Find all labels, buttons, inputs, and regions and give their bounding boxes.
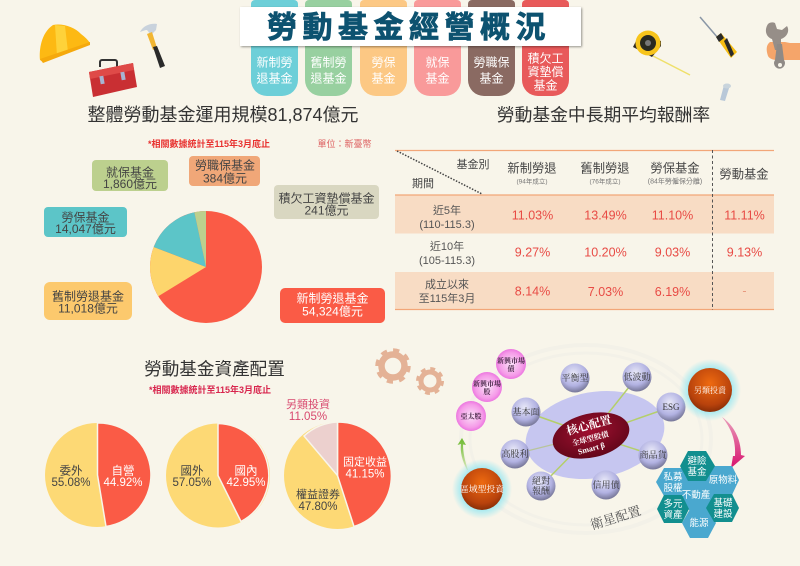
node: 商品貨 <box>638 440 668 470</box>
row: 近10年: 9.13% <box>727 246 762 260</box>
icon: helmet <box>40 24 90 63</box>
row: 成立以來: 6.19% <box>655 285 690 299</box>
satellite label: 衛星配置 <box>589 503 643 532</box>
row: 成立以來: - <box>742 284 747 298</box>
label: 舊制勞退基金: 11,018億元 <box>58 302 118 316</box>
hex: 多元資產 <box>657 495 689 523</box>
diagram: core satellite allocation <box>452 345 745 538</box>
table header <box>412 157 769 190</box>
core ellipse: Smart β <box>577 441 606 456</box>
tabs: fund categories <box>251 0 569 96</box>
pie: 國內 國外: 國外 <box>180 464 204 478</box>
pie: 固定收益 權益證券 另類投資: 41.15% <box>345 468 385 480</box>
icon: gears <box>377 350 442 394</box>
note: asset allocation date: *相關數據統計至115年3月底止 <box>149 384 271 395</box>
tab: 積欠工資墊償基金: 積欠工 <box>527 50 564 66</box>
node: 區域型投資: 區域型投資 <box>460 483 505 494</box>
node: 新興市場股: 新興市場 <box>473 379 501 388</box>
tab: 舊制勞退基金 <box>305 0 352 96</box>
pie: 國內 國外: 國內 <box>234 464 258 478</box>
row: 成立以來 <box>419 277 747 305</box>
tab: 積欠工資墊償基金: 資墊償 <box>527 65 564 79</box>
pie: 國內 國外: 57.05% <box>172 477 212 489</box>
tab: 積欠工資墊償基金: 基金 <box>533 78 558 92</box>
row: 成立以來: 至115年3月 <box>419 291 475 305</box>
note: data date: *相關數據統計至115年3月底止 <box>148 138 270 149</box>
node: 高股利: 高股利 <box>501 448 529 459</box>
node: 基本面: 基本面 <box>512 406 540 417</box>
node: 新興市場債: 新興市場 <box>497 356 525 365</box>
label: 新制勞退基金: 新制勞退基金 <box>296 290 369 306</box>
row: 成立以來: 7.03% <box>588 285 623 299</box>
tab: 舊制勞退基金: 退基金 <box>310 70 347 86</box>
node: 新興市場股 <box>472 372 502 402</box>
pie: 國內 國外 <box>166 424 270 528</box>
row: 近10年: 9.03% <box>655 246 690 260</box>
pie: 固定收益 權益證券 另類投資 <box>284 422 391 529</box>
hex: 基礎建設: 基礎 <box>713 497 733 509</box>
node: ESG <box>656 392 686 422</box>
title banner: 勞動基金經營概況 <box>267 12 551 44</box>
pie: 自營 委外 <box>45 423 151 527</box>
tab: 勞職保基金 <box>468 0 515 96</box>
label: 就保基金: 1,860億元 <box>103 177 157 191</box>
tab: 舊制勞退基金: 舊制勞 <box>310 56 347 70</box>
hex: 多元資產: 資產 <box>663 509 683 521</box>
pie: 自營 委外: 55.08% <box>51 477 91 489</box>
tab: 勞保基金: 勞保 <box>371 56 396 70</box>
pie chart: fund size <box>150 211 262 323</box>
label: 勞職保基金: 勞職保基金 <box>195 158 255 172</box>
node: 亞太股 <box>456 401 486 431</box>
hex: 私募股權: 股權 <box>663 482 683 494</box>
node: 低波動: 低波動 <box>623 371 651 382</box>
label: 積欠工資墊償基金: 241億元 <box>304 204 349 218</box>
label: 另類投資 <box>286 397 330 423</box>
pie: 固定收益 權益證券 另類投資: 固定收益 <box>343 454 387 468</box>
row: 近10年: (105-115.3) <box>419 255 475 267</box>
tab: 新制勞退基金: 新制勞 <box>256 54 293 70</box>
pie: 國內 國外: 42.95% <box>226 477 266 489</box>
pie: 自營 委外: 44.92% <box>103 477 143 489</box>
row: 近5年: 近5年 <box>433 203 461 217</box>
row: 成立以來: 成立以來 <box>425 277 469 291</box>
icon: screwdriver <box>700 17 737 58</box>
table header: (76年成立) <box>589 176 621 186</box>
tab: 新制勞退基金: 退基金 <box>256 70 293 86</box>
hex: 避險基金: 基金 <box>687 466 707 478</box>
row: 近10年: 9.27% <box>515 246 550 260</box>
pie: 自營 委外: 委外 <box>60 464 83 478</box>
node: 另類投資: 另類投資 <box>694 385 727 395</box>
node: 基本面 <box>512 398 540 426</box>
node: 絕對報酬 <box>526 472 556 500</box>
heading: total fund size: 整體勞動基金運用規模81,874億元 <box>87 105 359 125</box>
core ellipse: 全球型股債 <box>571 428 611 448</box>
row: 近5年: 11.03% <box>512 208 553 222</box>
tab: 就保基金: 基金 <box>425 70 450 86</box>
icon: hand with wrench <box>766 22 800 69</box>
hex: 多元資產: 多元 <box>663 498 683 510</box>
node: 絕對報酬: 報酬 <box>532 485 550 496</box>
label: 另類投資: 11.05% <box>289 411 327 423</box>
node: 絕對報酬: 絕對 <box>532 475 550 486</box>
label: 積欠工資墊償基金 <box>274 185 379 219</box>
label: 勞保基金: 14,047億元 <box>55 222 116 236</box>
label: 勞保基金: 勞保基金 <box>61 210 110 224</box>
row: 近5年: 13.49% <box>584 208 627 222</box>
node: 信用債 <box>592 470 620 500</box>
label: 舊制勞退基金: 舊制勞退基金 <box>52 288 124 304</box>
arrow: magenta <box>722 417 745 468</box>
note: unit: 單位：新臺幣 <box>317 138 372 149</box>
table header: 勞保基金 <box>650 160 700 176</box>
label: 新制勞退基金: 54,324億元 <box>302 304 363 318</box>
hex: 私募股權 <box>656 468 689 496</box>
label: 就保基金 <box>92 160 168 191</box>
node: 低波動 <box>622 362 652 392</box>
label: 勞保基金 <box>44 207 127 237</box>
icon: hammer <box>140 24 165 68</box>
node: 亞太股: 亞太股 <box>460 412 482 420</box>
tab: 就保基金 <box>414 0 461 96</box>
node: 區域型投資 <box>452 459 512 519</box>
node: 平衡型: 平衡型 <box>561 372 589 383</box>
hex: 不動產: 不動產 <box>682 489 711 501</box>
node: 高股利 <box>500 440 530 468</box>
node: 新興市場股: 股 <box>484 387 490 396</box>
node: 商品貨: 商品貨 <box>639 449 667 460</box>
arrow: green <box>458 438 468 470</box>
table header: 舊制勞退 <box>580 162 630 176</box>
label: 就保基金: 就保基金 <box>106 164 154 180</box>
core ellipse: 核心配置 <box>565 412 613 438</box>
row: 近5年: 11.10% <box>652 208 693 222</box>
label: 勞職保基金: 384億元 <box>203 172 247 186</box>
hexagon cluster: alternatives <box>656 451 739 538</box>
node: 新興市場債: 債 <box>508 364 516 373</box>
node: 另類投資 <box>679 359 741 421</box>
node: 信用債: 信用債 <box>592 479 620 490</box>
table header: 期間 <box>412 177 434 190</box>
table header: 新制勞退 <box>507 160 557 176</box>
tab: 勞保基金: 基金 <box>371 70 396 86</box>
label: 舊制勞退基金 <box>44 282 132 320</box>
orbit rings <box>461 345 711 533</box>
table header: 勞動基金 <box>719 166 769 182</box>
hex: 避險基金: 避險 <box>687 455 707 467</box>
row: 近5年: (110-115.3) <box>419 219 475 231</box>
tab: 新制勞退基金 <box>251 0 298 96</box>
node: 新興市場債 <box>496 349 526 379</box>
label: 新制勞退基金 <box>280 288 385 323</box>
row: 近5年: 11.11% <box>724 208 765 222</box>
row: 近10年: 10.20% <box>584 246 627 260</box>
row: 近10年: 近10年 <box>430 239 464 253</box>
pie: 固定收益 權益證券 另類投資: 權益證券 <box>296 487 340 501</box>
label: 勞職保基金 <box>189 156 260 186</box>
heading: asset allocation: 勞動基金資產配置 <box>144 359 285 379</box>
hex: 私募股權: 私募 <box>663 471 683 483</box>
core ellipse <box>515 377 671 490</box>
hex: 基礎建設 <box>706 494 739 522</box>
table header: (84年勞僱保分離) <box>648 176 702 186</box>
tab: 勞保基金 <box>360 0 407 96</box>
hex: 原物料: 原物料 <box>709 474 738 486</box>
pie: 自營 委外: 自營 <box>112 464 134 478</box>
table header: (94年成立) <box>516 176 548 186</box>
hex: 基礎建設: 建設 <box>713 508 733 520</box>
icon: tape measure <box>633 30 690 75</box>
heading: long term returns: 勞動基金中長期平均報酬率 <box>497 105 710 125</box>
row: 近10年 <box>419 239 762 267</box>
label: 積欠工資墊償基金: 積欠工資墊償基金 <box>278 190 375 206</box>
node: ESG: ESG <box>662 402 680 412</box>
tab: 勞職保基金: 勞職保 <box>473 56 510 70</box>
row: 成立以來: 8.14% <box>515 284 550 298</box>
table: returns <box>395 150 774 310</box>
tab: 就保基金: 就保 <box>425 56 450 70</box>
icon: screw <box>720 84 731 101</box>
hex: 能源: 能源 <box>689 517 709 529</box>
label: 另類投資: 另類投資 <box>286 397 330 411</box>
node: 平衡型 <box>560 364 590 392</box>
icon: toolbox <box>89 60 137 97</box>
row: 近5年 <box>419 203 765 231</box>
hex: 避險基金 <box>680 451 715 481</box>
tab: 勞職保基金: 基金 <box>479 70 504 86</box>
pie: 固定收益 權益證券 另類投資: 47.80% <box>298 501 338 513</box>
tab: 積欠工資墊償基金 <box>522 0 569 96</box>
table header: 基金別 <box>456 157 490 171</box>
